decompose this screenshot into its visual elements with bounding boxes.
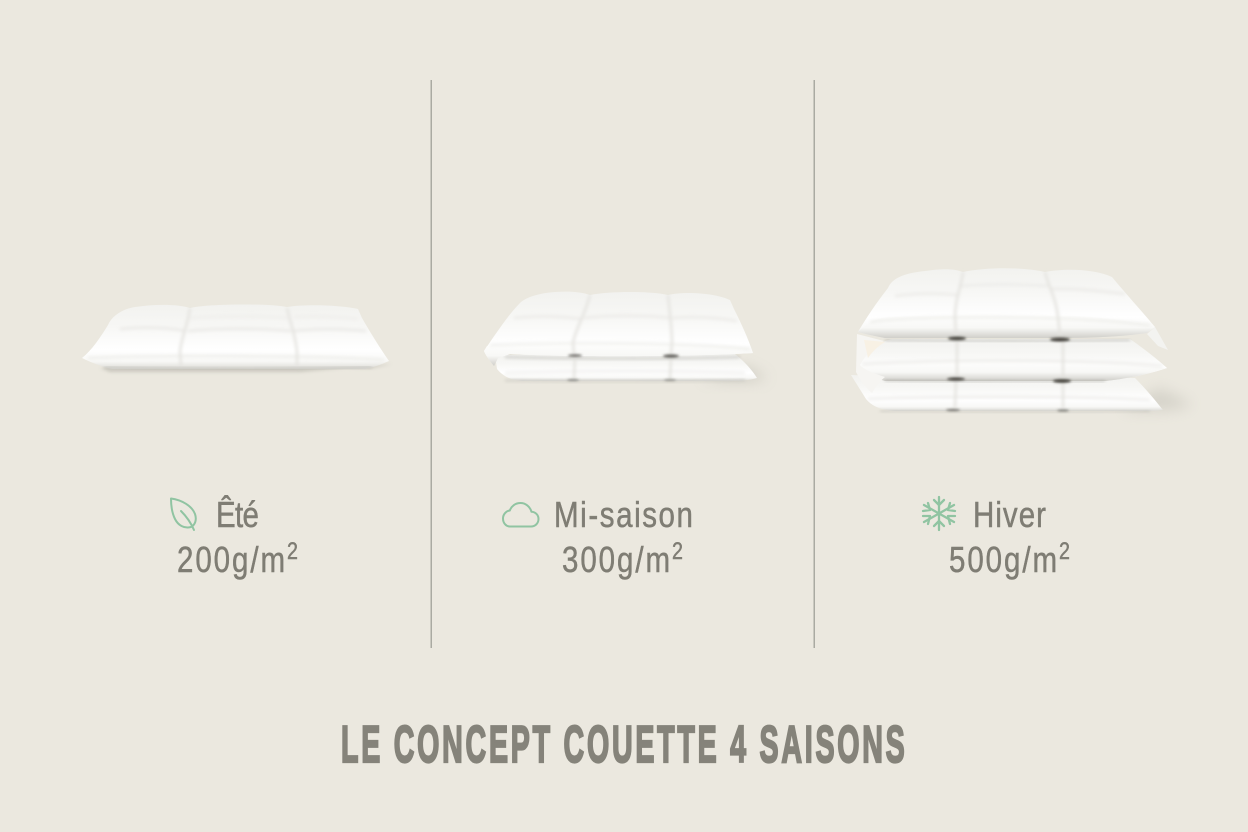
middle layer [858, 339, 1167, 383]
weight: 500 g/m²: 2 [1059, 537, 1070, 564]
bottom layer [851, 375, 1163, 412]
left fold flap [856, 334, 885, 393]
label: mi-saison [503, 494, 693, 580]
duvet: three layers [851, 268, 1192, 412]
weight: 200 g/m²: 2 [287, 537, 298, 564]
icon: snowflake [923, 497, 955, 530]
weight: 500 g/m²: 500g/m [949, 539, 1057, 580]
divider right [814, 80, 815, 648]
duvet: one layer [82, 304, 392, 372]
season name: été: Êté [216, 494, 259, 535]
top layer [858, 268, 1168, 350]
icon: cloud [503, 503, 538, 526]
divider left [430, 80, 432, 648]
season name: mi-saison: Mi-saison [554, 494, 693, 535]
duvet: two layers [484, 292, 768, 381]
season name: hiver: Hiver [973, 494, 1046, 535]
weight: 300 g/m²: 2 [672, 537, 683, 564]
panel: mi-saison [484, 292, 768, 381]
weight: 300 g/m²: 300g/m [562, 539, 670, 580]
seam shadows [567, 354, 679, 381]
panel: hiver [851, 268, 1192, 412]
label: été [171, 494, 298, 580]
weight: 200 g/m²: 200g/m [177, 539, 285, 580]
panel: été [82, 304, 392, 372]
title: LE CONCEPT COUETTE 4 SAISONS [341, 715, 905, 773]
label: hiver [923, 494, 1070, 580]
icon: leaf [171, 498, 196, 530]
